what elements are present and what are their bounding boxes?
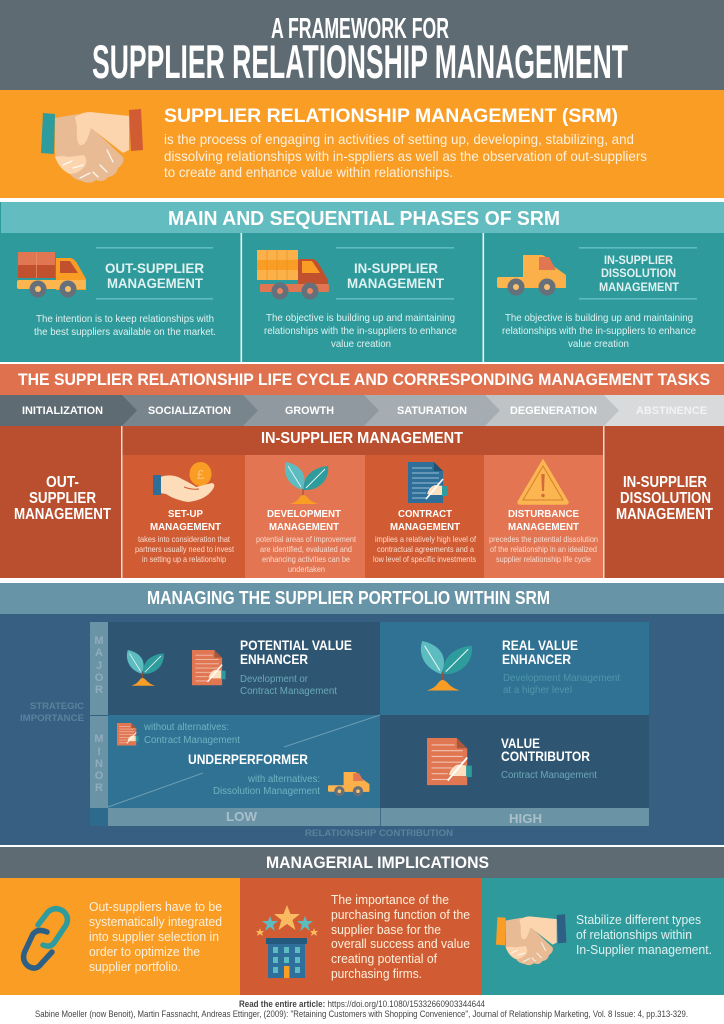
quadrant text — [240, 673, 337, 697]
implication text: supplier portfolio. — [89, 959, 181, 974]
task title — [508, 508, 580, 533]
quadrant title: CONTRIBUTOR — [501, 749, 590, 764]
panel: managerial implications — [0, 847, 724, 995]
task title: MANAGEMENT — [269, 521, 340, 533]
implication text: into supplier selection in — [89, 929, 219, 944]
without alternatives text — [143, 721, 240, 746]
panel: SRM definition — [0, 90, 724, 198]
definition text: is the process of engaging in activities of setting up, developing, stabilizing, and — [164, 131, 634, 147]
with alternatives text: Dissolution Management — [213, 785, 320, 797]
icon: warning triangle — [518, 460, 568, 504]
implication text: The importance of the — [331, 892, 449, 907]
in-supplier dissolution label — [616, 474, 713, 523]
task: development management — [245, 455, 365, 578]
title line 1: A FRAMEWORK FOR — [271, 13, 449, 45]
phase: in-supplier — [257, 247, 457, 350]
matrix axes: STRATEGIC — [30, 701, 84, 712]
icon: document — [192, 650, 226, 685]
definition text — [164, 131, 647, 180]
implication: stabilize relationships — [482, 878, 724, 995]
matrix axes: I — [97, 746, 101, 758]
icon: truck with orange cargo — [257, 250, 329, 300]
definition heading: SUPPLIER RELATIONSHIP MANAGEMENT (SRM) — [164, 106, 618, 127]
task description: implies a relatively high level of — [375, 534, 477, 544]
task description: potential areas of improvement — [256, 534, 357, 544]
header panel — [0, 0, 724, 90]
footer citation — [35, 999, 688, 1019]
life cycle stages: DEGENERATION — [510, 405, 597, 417]
panel: main phases — [0, 202, 724, 362]
task title — [150, 508, 222, 533]
phase description — [264, 312, 457, 350]
implication text: systematically integrated — [89, 914, 222, 929]
phase description — [502, 312, 696, 350]
phase title: IN-SUPPLIER — [354, 260, 438, 276]
phase title: DISSOLUTION — [601, 266, 676, 280]
panel: supplier portfolio — [0, 583, 724, 845]
without alternatives text: Contract Management — [144, 734, 240, 746]
implication: out-suppliers — [0, 878, 240, 995]
phase title — [347, 260, 444, 291]
matrix axes: M — [94, 733, 104, 745]
quadrant text: Development or — [240, 673, 308, 685]
phase title — [105, 260, 204, 291]
quadrant title: ENHANCER — [502, 652, 571, 667]
task title — [390, 508, 461, 533]
implication text: Out-suppliers have to be — [89, 899, 222, 914]
quadrant text: Contract Management — [501, 769, 597, 781]
panel: life cycle — [0, 364, 724, 578]
task description: undertaken — [288, 564, 325, 574]
matrix axes: R — [95, 782, 103, 794]
task description: supplier relationship life cycle — [496, 554, 591, 564]
task title: MANAGEMENT — [390, 521, 461, 533]
implication text — [576, 912, 712, 957]
implication text: creating potential of — [331, 951, 437, 966]
quadrant text: at a higher level — [503, 684, 572, 696]
life cycle stages: ABSTINENCE — [636, 405, 707, 417]
icon: sprout — [285, 462, 328, 504]
matrix axes: HIGH — [509, 811, 542, 826]
out-supplier management label — [14, 474, 111, 523]
phase description: relationships with the in-suppliers to enhance — [502, 325, 696, 337]
in-supplier dissolution label: IN-SUPPLIER — [623, 474, 707, 491]
implication text: supplier base for the — [331, 922, 441, 937]
task description: partners usually need to invest — [135, 544, 235, 554]
footer citation: Read the entire article: https://doi.org/10.1080/15332660903344644 — [239, 999, 485, 1009]
definition text: to create and enhance value within relationships. — [164, 164, 453, 180]
matrix axes: O — [95, 672, 104, 684]
phase description: The intention is to keep relationships with — [36, 313, 214, 325]
icon: small document — [117, 723, 138, 746]
quadrant title: POTENTIAL VALUE — [240, 638, 352, 653]
implication text: purchasing firms. — [331, 966, 422, 981]
task title — [267, 508, 342, 533]
quadrant title: REAL VALUE — [502, 638, 578, 653]
task: disturbance management — [484, 455, 603, 578]
task description — [135, 534, 235, 564]
task description — [256, 534, 357, 574]
icon: sprout — [127, 650, 164, 686]
quadrant: underperformer — [108, 715, 380, 808]
in-supplier management heading: IN-SUPPLIER MANAGEMENT — [261, 430, 463, 447]
icon: large document — [427, 738, 472, 785]
quadrant title: UNDERPERFORMER — [188, 752, 308, 767]
quadrant text: Contract Management — [240, 685, 337, 697]
quadrant title — [501, 736, 590, 764]
phase title: OUT-SUPPLIER — [105, 260, 204, 276]
phase description: The objective is building up and maintaining — [266, 312, 455, 324]
phase title: MANAGEMENT — [107, 275, 203, 291]
portfolio heading: MANAGING THE SUPPLIER PORTFOLIO WITHIN SRM — [147, 588, 550, 608]
quadrant text: Development Management — [503, 672, 620, 684]
out-supplier management label: SUPPLIER — [29, 490, 96, 507]
phase description — [34, 313, 216, 338]
phase title: IN-SUPPLIER — [604, 253, 673, 267]
task: contract management — [365, 455, 484, 578]
task description — [489, 534, 598, 564]
implication text: In-Supplier management. — [576, 942, 712, 957]
with alternatives text: with alternatives: — [247, 773, 320, 785]
quadrant: value contributor — [380, 715, 649, 808]
quadrant title — [502, 638, 578, 667]
icon: hand with coin: £ — [197, 467, 205, 482]
task title: DEVELOPMENT — [267, 508, 342, 520]
task description: in setting up a relationship — [142, 554, 226, 564]
task title: MANAGEMENT — [508, 521, 580, 533]
phases heading: MAIN AND SEQUENTIAL PHASES OF SRM — [168, 208, 560, 230]
without alternatives text: without alternatives: — [143, 721, 229, 733]
icon: truck with red cargo — [17, 252, 86, 298]
icon: handshake — [41, 109, 143, 183]
phase: dissolution — [497, 247, 697, 350]
quadrant title: ENHANCER — [240, 652, 308, 667]
task description: of the relationship in an idealized — [490, 544, 597, 554]
icon: empty truck — [497, 255, 566, 296]
quadrant title — [240, 638, 352, 667]
implication text — [331, 892, 470, 981]
in-supplier dissolution label: DISSOLUTION — [620, 490, 711, 507]
matrix axes: N — [95, 758, 103, 770]
task description: enhancing activities can be — [262, 554, 350, 564]
matrix axes: A — [95, 647, 103, 659]
phase description: value creation — [331, 338, 391, 350]
icon: contract document — [408, 462, 447, 503]
with alternatives text — [213, 773, 320, 797]
icon: handshake — [496, 914, 566, 965]
matrix axes: IMPORTANCE — [20, 713, 84, 724]
quadrant title: VALUE — [501, 736, 540, 751]
task description: precedes the potential dissolution — [489, 534, 598, 544]
task title: CONTRACT — [398, 508, 453, 520]
life cycle stages — [0, 395, 724, 426]
implications heading: MANAGERIAL IMPLICATIONS — [266, 853, 489, 872]
matrix axes: LOW — [226, 809, 258, 824]
icon: chain link — [24, 909, 67, 968]
implication text: of relationships within — [576, 927, 692, 942]
task description: low level of specific investments — [373, 554, 476, 564]
task description: takes into consideration that — [138, 534, 231, 544]
phase description: the best suppliers available on the market. — [34, 326, 216, 338]
life cycle stages: INITIALIZATION — [22, 405, 103, 417]
task: set-up management — [122, 455, 245, 578]
matrix axes: RELATIONSHIP CONTRIBUTION — [305, 828, 453, 839]
out-supplier management label: OUT- — [46, 474, 79, 491]
life cycle stages: GROWTH — [285, 405, 334, 417]
phase description: The objective is building up and maintaining — [505, 312, 693, 324]
phase title: MANAGEMENT — [347, 275, 444, 291]
matrix axes — [20, 622, 649, 839]
task title: MANAGEMENT — [150, 521, 222, 533]
matrix axes: R — [95, 684, 103, 696]
icon: large sprout — [421, 641, 472, 691]
phase description: relationships with the in-suppliers to enhance — [264, 325, 457, 337]
icon: small truck — [328, 772, 369, 796]
life cycle stages: SOCIALIZATION — [148, 405, 231, 417]
life cycle stages: SATURATION — [397, 405, 467, 417]
implication text: order to optimize the — [89, 944, 200, 959]
task description — [373, 534, 477, 564]
phase title: MANAGEMENT — [599, 280, 680, 294]
task description: are identified, evaluated and — [260, 544, 352, 554]
implication: purchasing function — [240, 878, 482, 995]
task title: DISTURBANCE — [508, 508, 579, 520]
task title: SET-UP — [168, 508, 203, 520]
implication text: Stabilize different types — [576, 912, 701, 927]
out-supplier management label: MANAGEMENT — [14, 506, 111, 523]
phase: out-supplier — [17, 247, 216, 338]
implication text — [89, 899, 222, 974]
matrix axes: O — [95, 770, 104, 782]
quadrant text — [503, 672, 620, 696]
quadrant: real value enhancer — [380, 622, 649, 715]
phase title — [599, 253, 680, 294]
phase description: value creation — [568, 338, 629, 350]
implication text: purchasing function of the — [331, 907, 470, 922]
quadrant: potential value enhancer — [108, 622, 380, 715]
matrix axes: J — [96, 660, 102, 672]
task description: contractual agreements and a — [377, 544, 474, 554]
icon: building with stars — [256, 905, 318, 978]
implication text: overall success and value — [331, 936, 470, 951]
definition text: dissolving relationships with in-sppliers as well as the observation of out-suppliers — [164, 148, 647, 164]
matrix axes: M — [94, 635, 104, 647]
